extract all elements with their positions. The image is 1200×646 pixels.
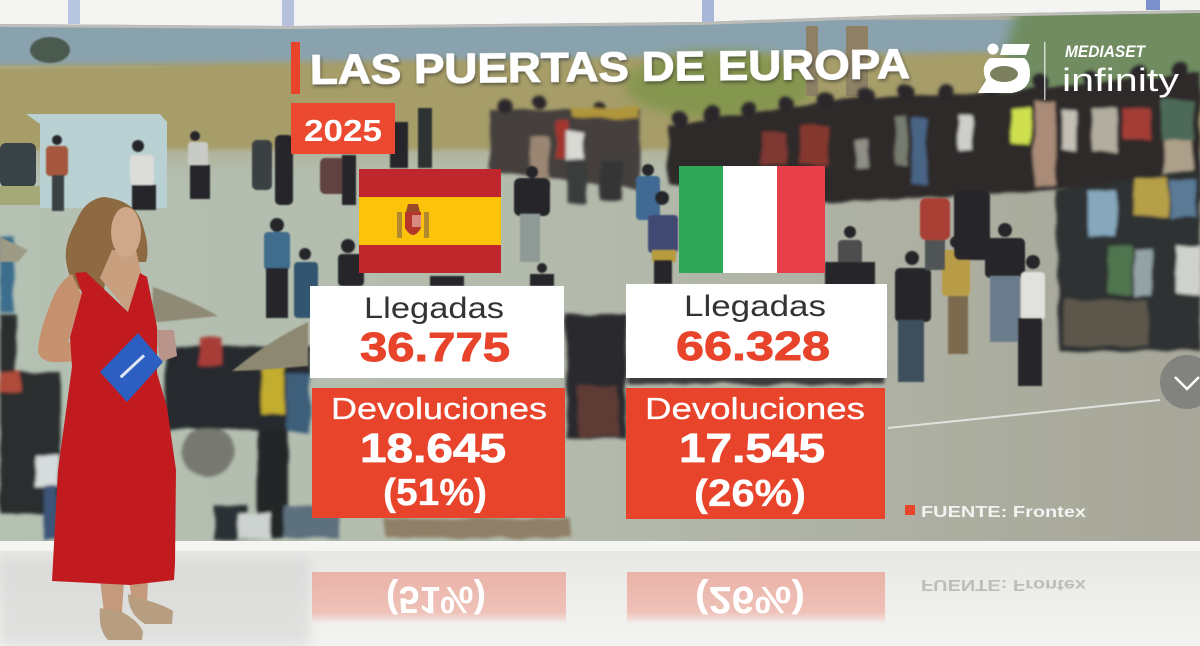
presenter	[38, 197, 177, 640]
arm	[38, 274, 122, 362]
thatched umbrellas	[152, 287, 218, 322]
studio floor with reflections: (26%)	[695, 578, 805, 620]
panel: Spain arrivals: 36.775	[360, 324, 510, 370]
middle sitting crowd	[384, 314, 884, 538]
studio floor with reflections	[0, 541, 1200, 646]
panel: Italy arrivals: Llegadas	[684, 290, 826, 323]
panel: Spain arrivals	[310, 286, 564, 378]
reflected figures: (51%)	[386, 578, 486, 620]
title: LAS PUERTAS DE EUROPA	[310, 40, 910, 93]
neck and chest	[100, 250, 142, 312]
panel: Italy returns: Devoluciones	[645, 391, 865, 426]
channel logo	[978, 42, 1179, 100]
flag: Italy	[679, 166, 825, 273]
flag: Spain	[359, 169, 501, 273]
panel: Spain arrivals: Llegadas	[364, 292, 504, 325]
scroll chevron button	[1160, 355, 1200, 409]
icon: Cuatro-style 5 mark	[978, 44, 1030, 93]
panel: Spain returns	[312, 388, 565, 518]
face	[111, 207, 141, 257]
left sitting crowd	[0, 238, 340, 540]
right crowd	[1056, 170, 1200, 352]
panel: Italy arrivals	[626, 284, 887, 378]
red dress	[52, 272, 176, 585]
panel: Italy returns	[626, 388, 885, 519]
faint road line	[888, 400, 1160, 428]
blue folder	[100, 333, 163, 402]
far crowd	[490, 62, 1200, 204]
panel: Spain returns: Devoluciones	[331, 391, 547, 426]
source note: FUENTE: Frontex	[921, 504, 1086, 521]
title accent bar	[291, 42, 300, 94]
panel: Spain returns: 18.645	[360, 425, 506, 471]
top studio light strip	[0, 0, 1200, 29]
channel logo: infinity	[1062, 62, 1179, 98]
panel: Italy returns: 17.545	[679, 425, 825, 471]
year badge: 2025	[304, 113, 382, 148]
hand	[155, 330, 177, 362]
panel: Italy arrivals: 66.328	[676, 323, 830, 369]
left cabin and car	[26, 114, 167, 208]
icon: coat of arms	[397, 204, 429, 238]
legs	[100, 580, 124, 612]
studio floor with reflections: FUENTE: Frontex	[921, 576, 1086, 593]
channel logo: MEDIASET	[1065, 42, 1146, 61]
sandals	[100, 608, 143, 640]
scattered standing people	[46, 108, 1045, 386]
hair	[66, 197, 147, 294]
panel: Spain returns: (51%)	[383, 472, 487, 514]
year badge	[291, 103, 395, 154]
panel: Italy returns: (26%)	[694, 473, 806, 515]
